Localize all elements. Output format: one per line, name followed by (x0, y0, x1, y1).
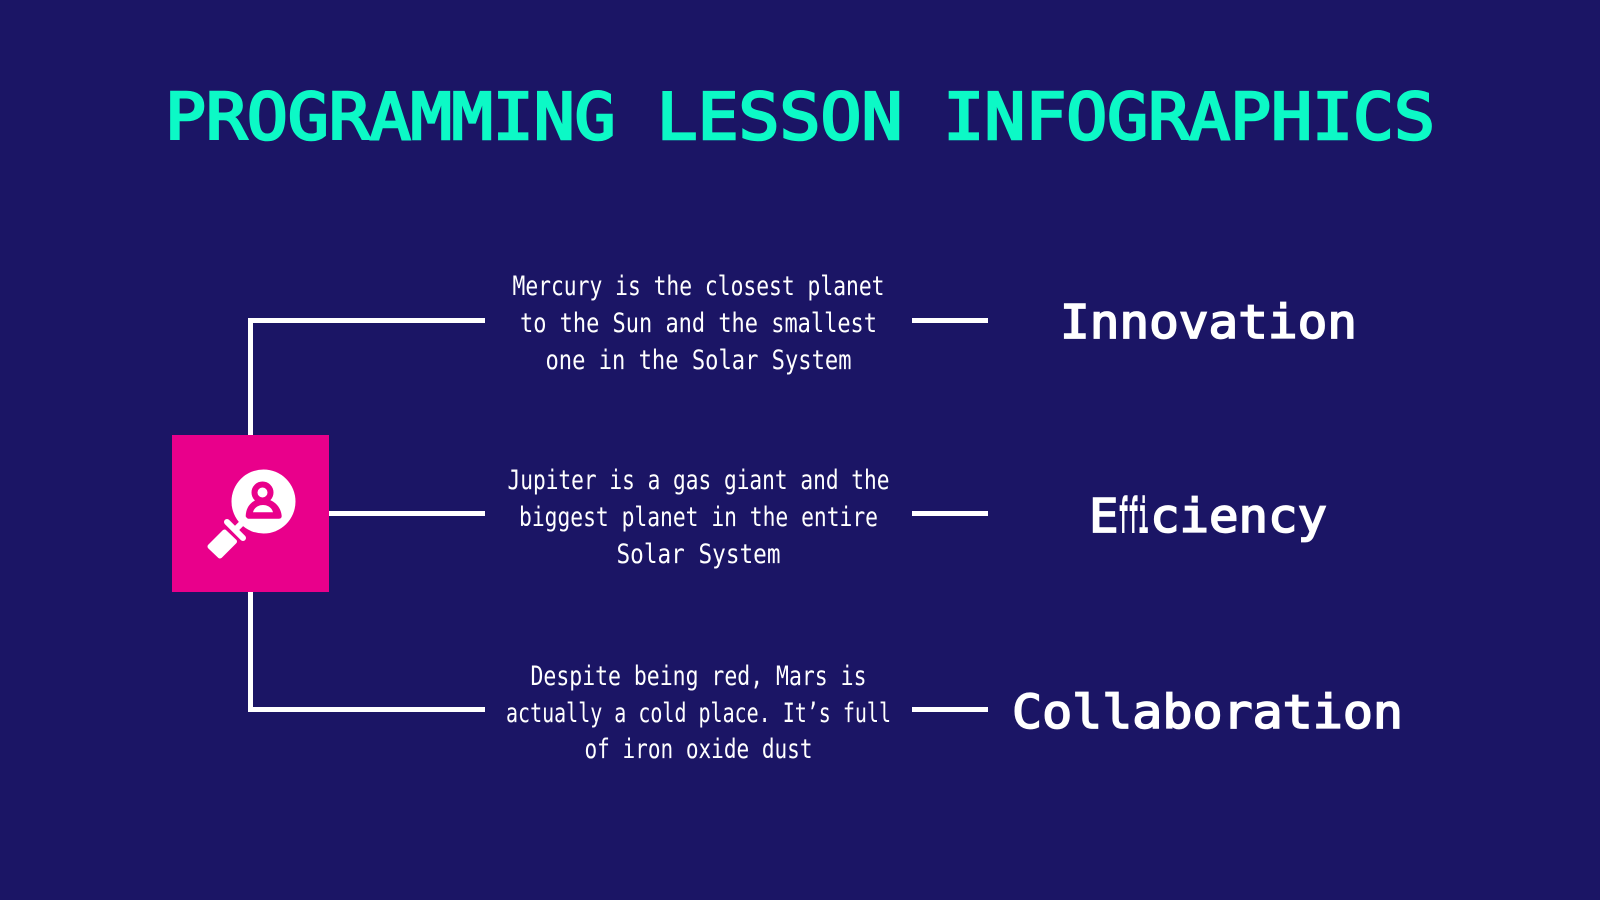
text block: Mars (506, 661, 891, 765)
text block: Mercury (512, 271, 884, 376)
dash: row 3 (912, 707, 988, 712)
heading: Efficiency: Efficiency (1089, 489, 1327, 543)
text block: Mercury: to the Sun and the smallest (520, 308, 877, 339)
connector: tree from icon to rows (250, 320, 485, 710)
text block: Jupiter: Solar System (616, 539, 780, 570)
icon: lens (232, 470, 296, 534)
text block: Jupiter: Jupiter is a gas giant and the (508, 465, 890, 496)
heading: Innovation: Innovation (1060, 295, 1357, 349)
text block: Mars: Despite being red, Mars is (530, 661, 866, 692)
text block: Jupiter: biggest planet in the entire (519, 502, 878, 533)
text block: Mars: actually a cold place. It’s full (506, 698, 891, 729)
text block: Mercury: one in the Solar System (546, 345, 852, 376)
icon: person (246, 484, 282, 519)
text block: Mercury: Mercury is the closest planet (512, 271, 884, 302)
text block: Jupiter (508, 465, 890, 570)
title: PROGRAMMING LESSON INFOGRAPHICS (165, 80, 1435, 155)
dash: row 2 (912, 511, 988, 516)
heading: Collaboration: Collaboration (1012, 685, 1403, 739)
dash: row 1 (912, 318, 988, 323)
icon: handle (210, 518, 247, 556)
icon panel: magnifying glass over person (172, 435, 329, 592)
text block: Mars: of iron oxide dust (584, 734, 812, 765)
